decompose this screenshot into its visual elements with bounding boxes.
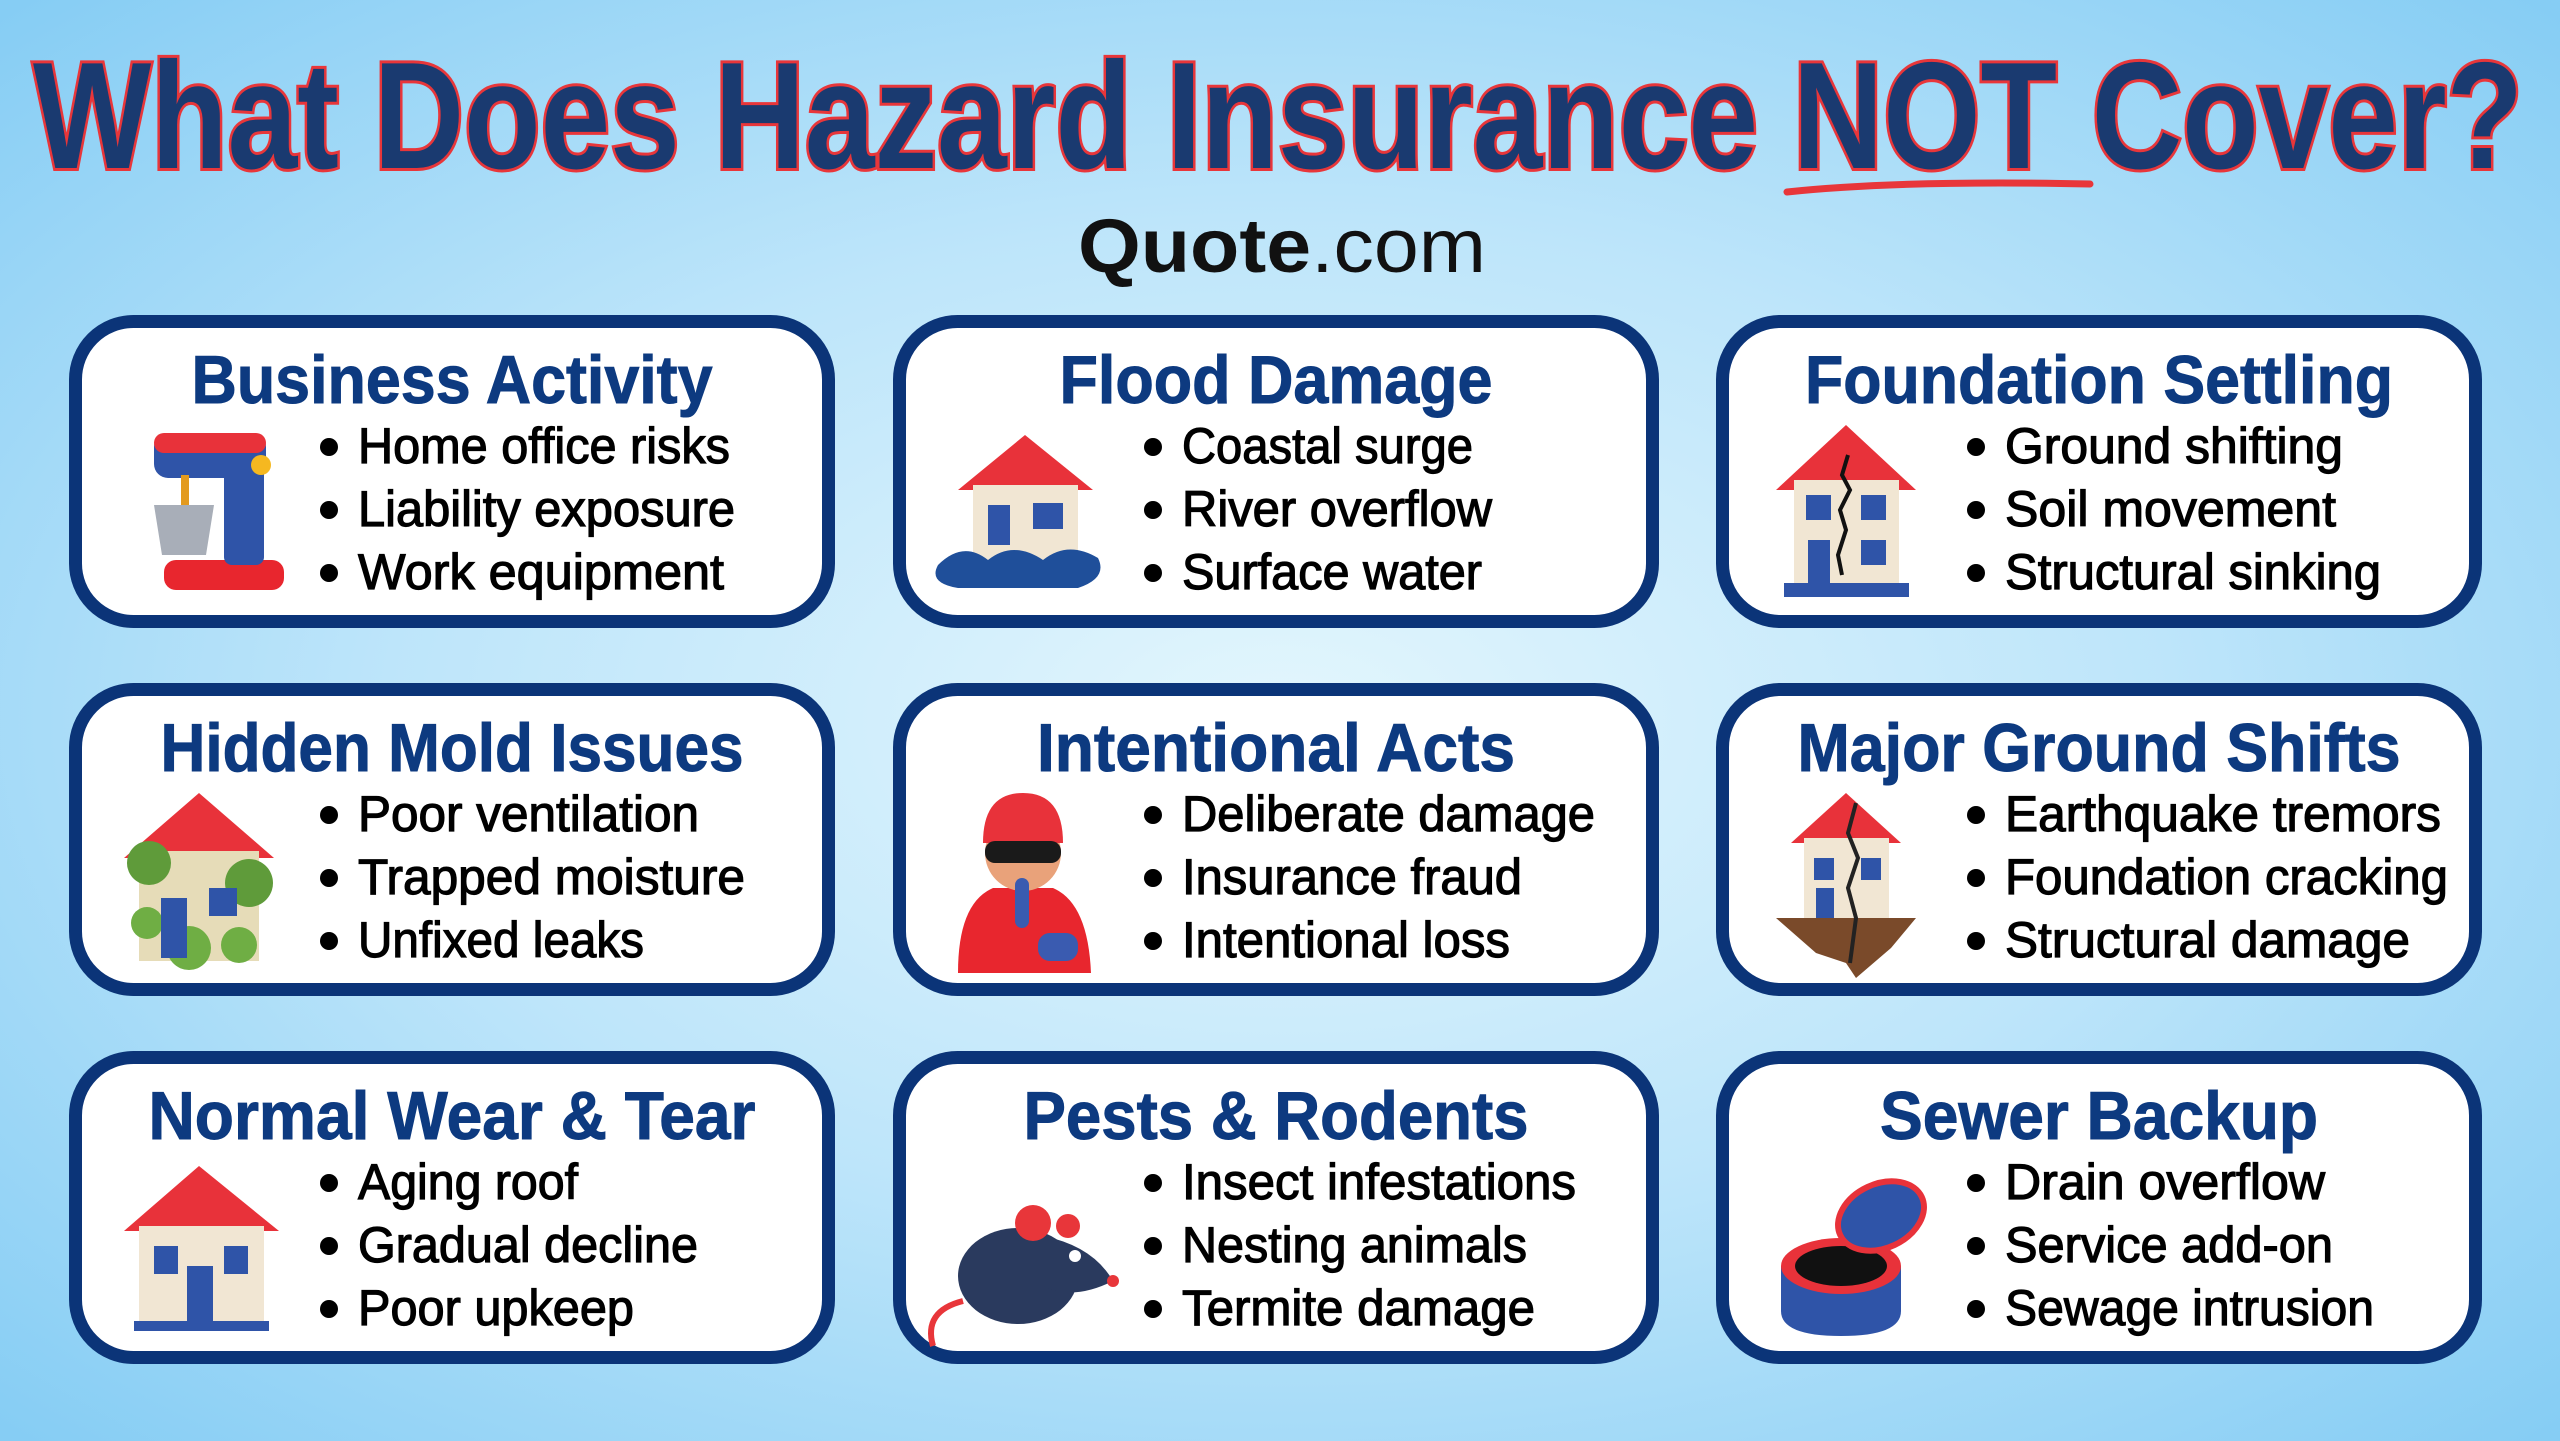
bullets: Structural damage (2005, 912, 2410, 968)
brand: Quote.com: Quote.com (1078, 204, 1486, 289)
heading: Normal Wear & Tear (148, 1078, 756, 1154)
bullets: Surface water (1182, 544, 1482, 600)
bullets: Service add-on (2005, 1217, 2333, 1273)
bullets (1144, 418, 1493, 600)
panel: Pests & Rodents (900, 1058, 1652, 1358)
bullets: Home office risks (358, 418, 730, 474)
icon: moldy house (124, 793, 274, 970)
panel: Intentional Acts (900, 690, 1652, 990)
bullets: Poor ventilation (358, 786, 699, 842)
bullets (1967, 786, 2448, 968)
icon: manhole (1781, 1168, 1935, 1336)
bullets: Work equipment (358, 544, 724, 600)
bullets: Poor upkeep (358, 1280, 634, 1336)
heading: Intentional Acts (1037, 710, 1515, 786)
bullets: Drain overflow (2005, 1154, 2326, 1210)
panel: Hidden Mold Issues (76, 690, 828, 990)
icon: flooded house (936, 435, 1100, 588)
bullets: Soil movement (2005, 481, 2336, 537)
bullets: Sewage intrusion (2005, 1280, 2374, 1336)
bullets (320, 1154, 698, 1336)
icon: rat (931, 1205, 1119, 1346)
bullets: Aging roof (358, 1154, 578, 1210)
icon: stand mixer (154, 433, 284, 590)
bullets: Deliberate damage (1182, 786, 1595, 842)
heading: Hidden Mold Issues (160, 710, 744, 786)
panel: Business Activity (76, 322, 828, 622)
bullets (1967, 418, 2381, 600)
bullets: Termite damage (1182, 1280, 1535, 1336)
bullets: Trapped moisture (358, 849, 745, 905)
bullets (1144, 786, 1595, 968)
bullets: River overflow (1182, 481, 1493, 537)
heading: Flood Damage (1060, 342, 1492, 418)
heading: Business Activity (192, 342, 713, 418)
bullets: Insect infestations (1182, 1154, 1576, 1210)
heading: Sewer Backup (1880, 1078, 2318, 1154)
bullets: Foundation cracking (2005, 849, 2448, 905)
bullets: Intentional loss (1182, 912, 1510, 968)
heading: Major Ground Shifts (1798, 710, 2400, 786)
bullets: Nesting animals (1182, 1217, 1527, 1273)
bullets: Structural sinking (2005, 544, 2381, 600)
bullets (320, 418, 735, 600)
icon: house (124, 1166, 279, 1331)
panel: Foundation Settling (1722, 322, 2476, 622)
icon: earthquake house (1776, 793, 1916, 978)
bullets (1144, 1154, 1576, 1336)
bullets (1967, 1154, 2374, 1336)
icon: cracked house (1776, 425, 1916, 597)
icon: masked person (958, 793, 1091, 973)
panel: Major Ground Shifts (1722, 690, 2476, 990)
panel: Normal Wear & Tear (76, 1058, 828, 1358)
bullets (320, 786, 745, 968)
bullets: Unfixed leaks (358, 912, 644, 968)
bullets: Coastal surge (1182, 418, 1473, 474)
bullets: Ground shifting (2005, 418, 2343, 474)
panel: Flood Damage (900, 322, 1652, 622)
bullets: Earthquake tremors (2005, 786, 2441, 842)
panel: Sewer Backup (1722, 1058, 2476, 1358)
bullets: Insurance fraud (1182, 849, 1522, 905)
heading: Pests & Rodents (1024, 1078, 1528, 1154)
heading: Foundation Settling (1805, 342, 2393, 418)
bullets: Gradual decline (358, 1217, 698, 1273)
bullets: Liability exposure (358, 481, 735, 537)
